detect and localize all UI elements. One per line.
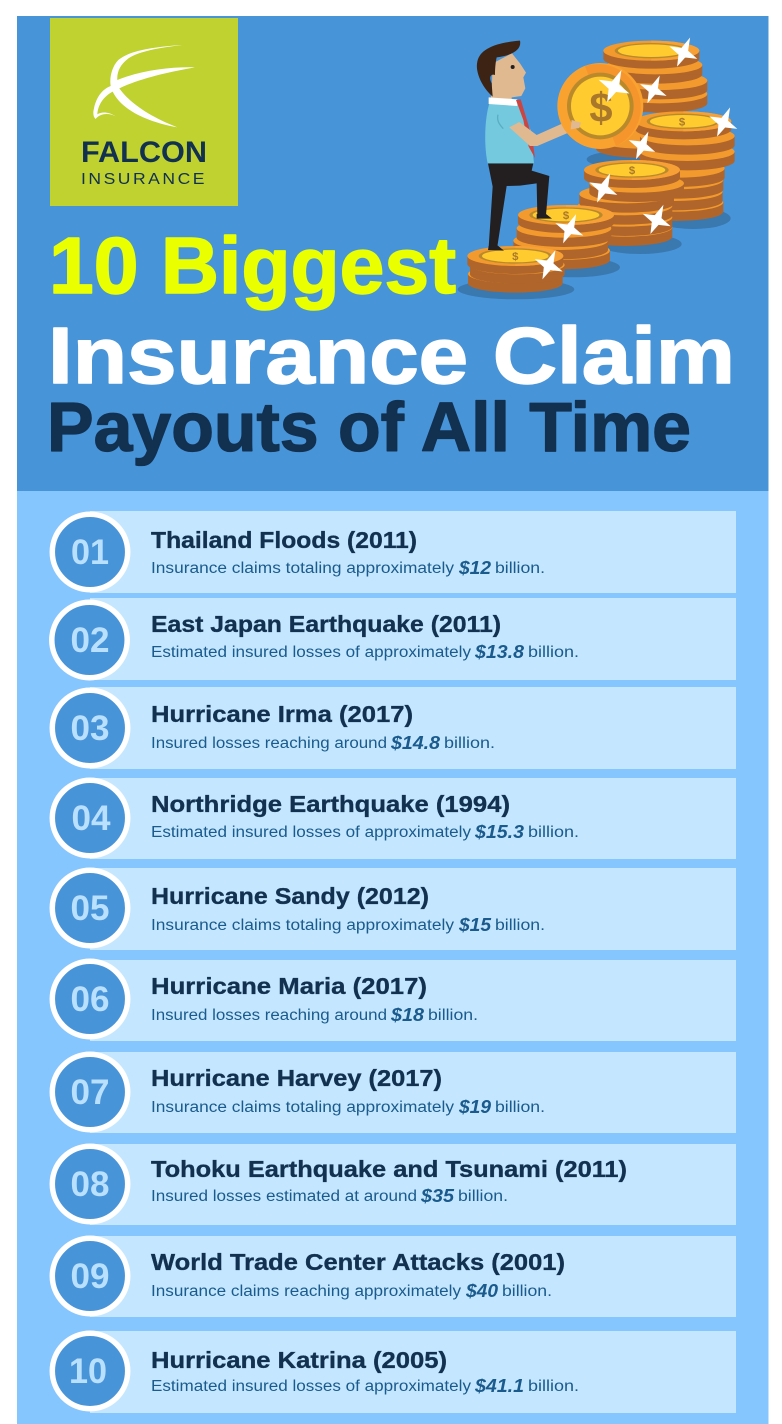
row 03: billion. (444, 735, 495, 752)
coin stack: step one (467, 246, 565, 293)
row 09: Insurance claims reaching approximately (151, 1283, 461, 1300)
neck and face (491, 53, 526, 102)
icon: falcon bird (93, 45, 195, 127)
row 06 (52, 960, 736, 1041)
row 10 (52, 1331, 736, 1413)
title: 10 Biggest: 10 Biggest (49, 221, 456, 310)
row 01: billion. (495, 560, 545, 577)
big gold coin: $ (589, 84, 613, 131)
row 10: Estimated insured losses of approximately (151, 1378, 471, 1395)
tie (516, 99, 535, 158)
row 02: Estimated insured losses of approximately (151, 644, 471, 661)
coin stack: right: $ (679, 116, 686, 128)
row 01: Insurance claims totaling approximately (151, 560, 454, 577)
coin stack: step one: $ (512, 251, 519, 263)
title: Payouts of All Time: Payouts of All Time (47, 388, 691, 466)
row 09: World Trade Center Attacks (2001) (151, 1249, 565, 1275)
row 09 (52, 1236, 736, 1317)
row 05: Insurance claims totaling approximately (151, 917, 454, 934)
row 08: 08 (70, 1165, 110, 1204)
row 08 (52, 1144, 736, 1225)
row 03: 03 (70, 709, 110, 748)
row 05: Hurricane Sandy (2012) (151, 883, 429, 909)
coin stack: back (596, 41, 707, 158)
row 04: Estimated insured losses of approximately (151, 824, 471, 841)
logo subtitle: INSURANCE (81, 171, 207, 188)
row 09: $40 (465, 1280, 499, 1301)
row 02: East Japan Earthquake (2011) (151, 611, 501, 637)
row 09: billion. (502, 1283, 552, 1300)
row 09: 09 (70, 1257, 110, 1296)
coin stack: middle (578, 160, 684, 246)
shirt (485, 103, 534, 163)
row 04: Northridge Earthquake (1994) (151, 791, 510, 817)
row 08: billion. (458, 1188, 508, 1205)
row 01: $12 (458, 557, 492, 578)
row 05: 05 (70, 889, 110, 928)
row 01 (52, 511, 736, 593)
panel: header background (17, 16, 768, 491)
row 05: $15 (458, 914, 492, 935)
row 02: $13.8 (474, 641, 525, 662)
row 02: billion. (528, 644, 579, 661)
row 06: billion. (428, 1007, 478, 1024)
row 02 (52, 598, 736, 680)
logo wordmark: FALCON (81, 136, 207, 169)
row 07: $19 (458, 1096, 492, 1117)
row 07 (52, 1052, 736, 1133)
row 06: Insured losses reaching around (151, 1007, 387, 1024)
row 10: $41.1 (474, 1375, 524, 1396)
row 08: Tohoku Earthquake and Tsunami (2011) (151, 1156, 627, 1182)
row 06: $18 (390, 1004, 425, 1025)
row 04: $15.3 (474, 821, 525, 842)
row 07: Insurance claims totaling approximately (151, 1099, 454, 1116)
row 05: billion. (495, 917, 545, 934)
row 10: billion. (528, 1378, 579, 1395)
title: Insurance Claim: Insurance Claim (48, 311, 735, 400)
row 03: $14.8 (390, 732, 441, 753)
row 06: 06 (70, 980, 110, 1019)
row 08: $35 (420, 1185, 455, 1206)
row 07: 07 (70, 1073, 110, 1112)
hair (477, 41, 520, 97)
row 03 (52, 687, 736, 769)
collar (489, 97, 517, 106)
coin stack: right (628, 111, 735, 221)
sparkles (528, 31, 744, 286)
coin stack: middle: $ (629, 165, 636, 177)
man figure (477, 41, 581, 251)
row 03: Insured losses reaching around (151, 735, 387, 752)
sleeve (497, 107, 518, 131)
row 01: Thailand Floods (2011) (151, 527, 417, 553)
row 04 (52, 778, 736, 859)
arm (509, 119, 581, 146)
coin stack shadows (458, 151, 731, 299)
big gold coin (557, 63, 643, 149)
row 07: Hurricane Harvey (2017) (151, 1065, 442, 1091)
row 02: 02 (70, 621, 110, 660)
row 05 (52, 868, 736, 950)
row 10: Hurricane Katrina (2005) (151, 1347, 447, 1373)
illustration: man climbing coin stacks (458, 31, 744, 299)
row 08: Insured losses estimated at around (151, 1188, 417, 1205)
coin stack: step two: $ (563, 210, 570, 222)
row 03: Hurricane Irma (2017) (151, 701, 413, 727)
row 04: 04 (72, 799, 111, 838)
row 07: billion. (495, 1099, 545, 1116)
trousers (488, 163, 549, 247)
logo: Falcon Insurance (50, 18, 238, 206)
panel: list background (17, 491, 768, 1424)
row 04: billion. (528, 824, 579, 841)
row 10: 10 (69, 1352, 107, 1391)
row 01: 01 (71, 533, 109, 572)
coin stack: step two (513, 205, 614, 269)
row 06: Hurricane Maria (2017) (151, 973, 427, 999)
